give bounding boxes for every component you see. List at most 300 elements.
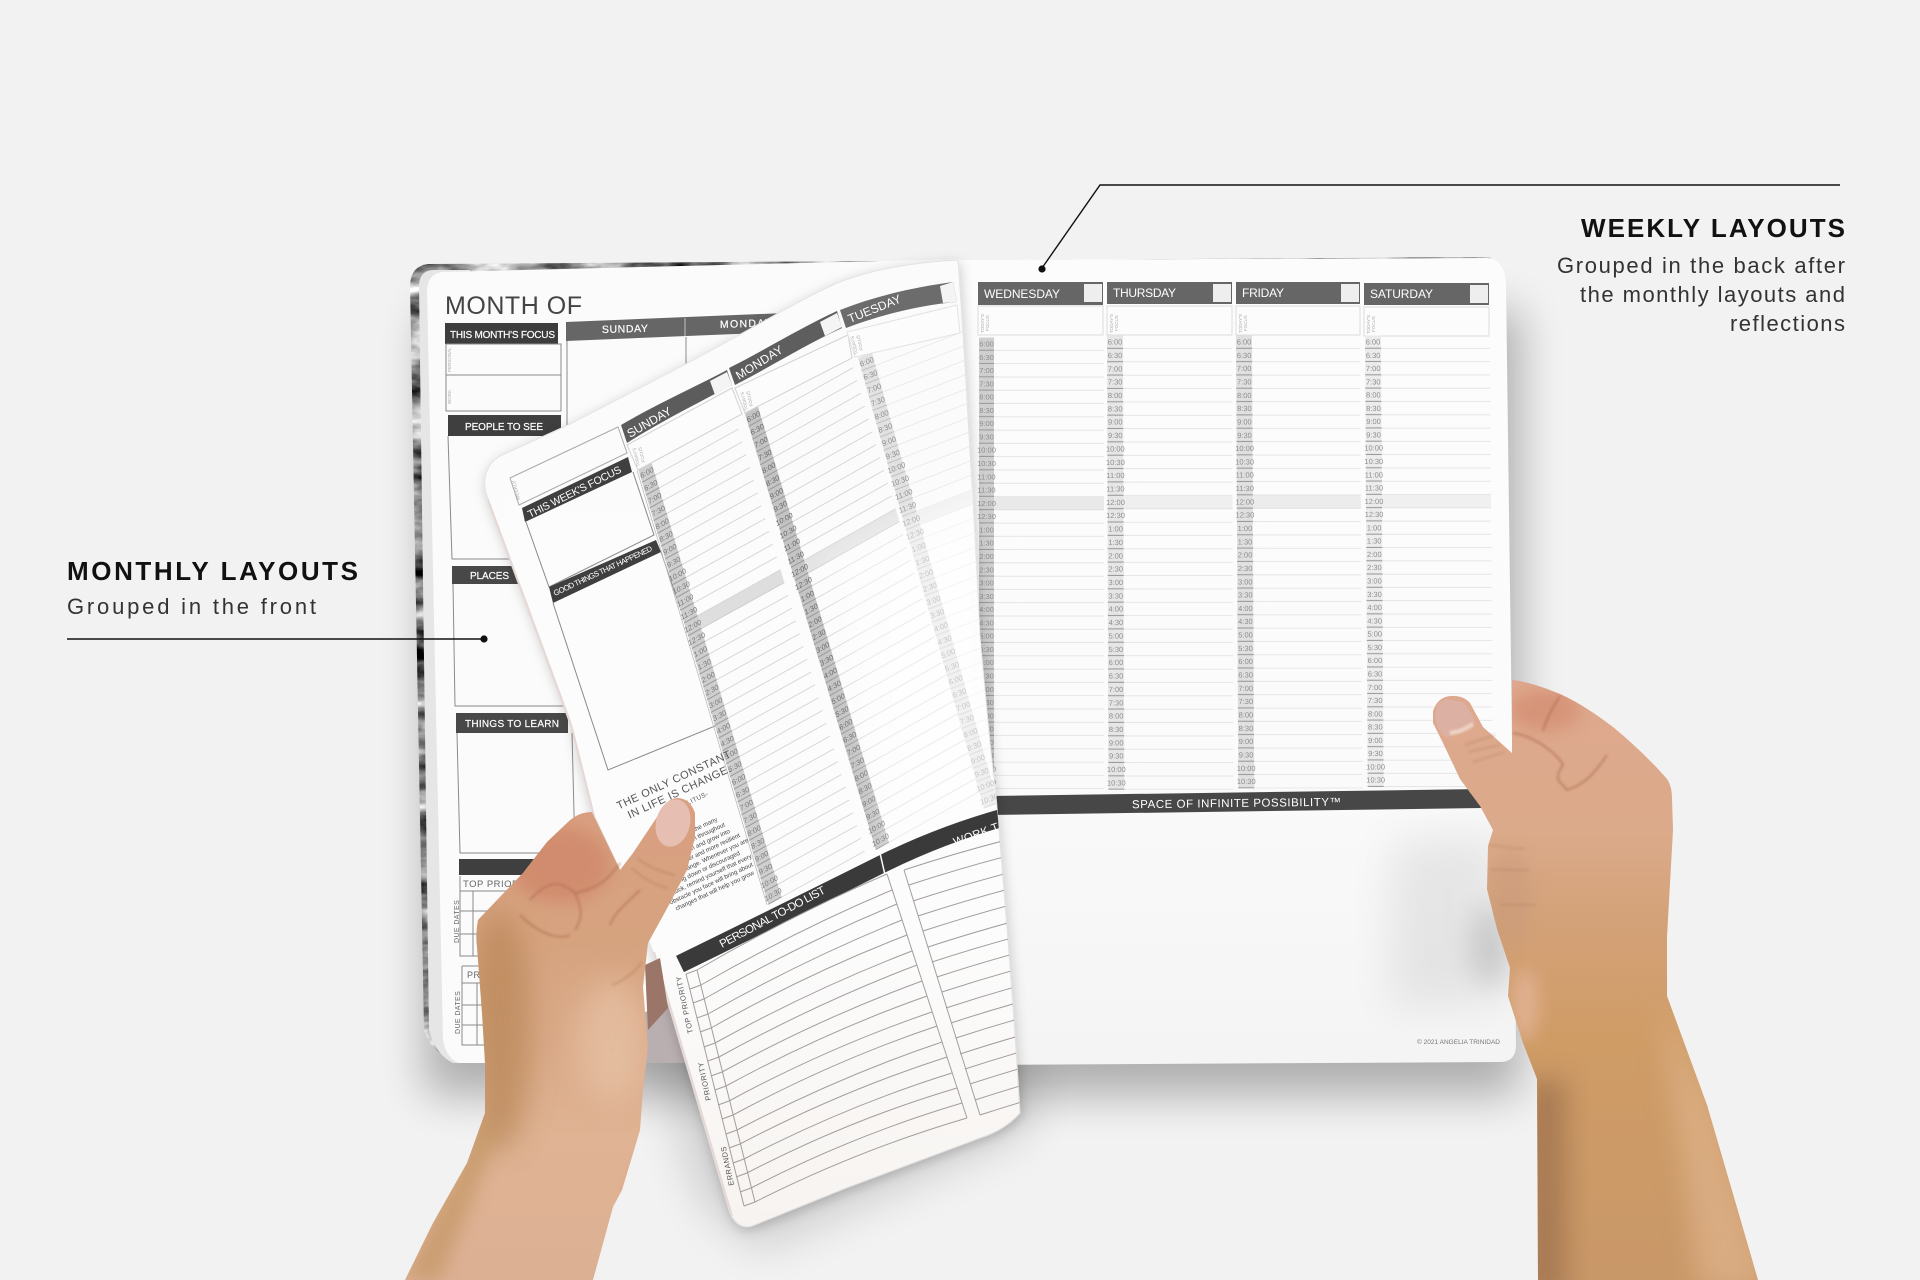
- dark forearm edge: [405, 1110, 500, 1280]
- column: monday: 12:00: [790, 562, 809, 579]
- shadow under thumb: [645, 958, 668, 1030]
- column: monday: 1:30: [804, 601, 819, 617]
- time rows: 11:30: [1365, 484, 1383, 493]
- column: sunday: 10:30: [764, 886, 783, 904]
- column: monday: 2:00: [807, 614, 823, 630]
- label: errands: ERRANDS: [719, 1145, 736, 1186]
- left page sheet: [427, 259, 960, 1063]
- column: monday: 9:30: [773, 499, 788, 514]
- time rows: 6:30: [1368, 670, 1382, 678]
- day header: monday: [729, 311, 842, 385]
- column: sunday: 5:00: [723, 746, 739, 762]
- time rows: 9:30: [1368, 749, 1383, 758]
- callout: monthly layouts: [67, 556, 488, 643]
- time rows: 6:00: [979, 658, 994, 667]
- places: PLACES: [470, 571, 509, 582]
- hand shape: [405, 798, 695, 1280]
- day header: tuesday: TUESDAY: [846, 292, 903, 326]
- heading: WEEKLY LAYOUTS: [1581, 213, 1845, 243]
- callout: weekly layouts: [1038, 185, 1845, 336]
- column: wednesday: [977, 282, 1104, 789]
- column: monday: 10:00: [775, 510, 794, 528]
- quote: the only constant: -HERACLITUS-: [661, 791, 710, 818]
- time rows: 11:00: [1236, 471, 1254, 480]
- time rows: 5:00: [1367, 630, 1382, 639]
- time rows: 11:30: [1106, 484, 1125, 494]
- time rows: 9:30: [979, 432, 994, 441]
- today's focus boxes: FOCUS: [637, 446, 646, 463]
- time rows: 7:30: [979, 698, 994, 707]
- leader dot: [1038, 265, 1046, 273]
- today's focus box: [978, 306, 1103, 335]
- good things that happened: [549, 540, 720, 770]
- time rows: 2:00: [1367, 550, 1382, 559]
- wrinkled palm edge: [1488, 852, 1532, 948]
- priorities tables: DUE DATES: [455, 991, 462, 1034]
- today's focus box: [1107, 306, 1232, 335]
- time rows: 10:30: [1106, 458, 1125, 467]
- time rows: 8:00: [1239, 710, 1253, 719]
- heading: month of: MONTH OF: [445, 292, 582, 320]
- time rows: 3:30: [1367, 590, 1382, 599]
- time rows: 8:00: [1109, 712, 1123, 721]
- book cover: marble: [410, 257, 1500, 1056]
- people to see: [448, 415, 561, 559]
- column: monday: 10:00: [867, 818, 886, 836]
- time rows: 10:00: [977, 446, 996, 455]
- time rows: 12:00: [1106, 498, 1125, 507]
- column: tuesday: 6:30: [862, 368, 879, 382]
- today's focus box: [1236, 306, 1360, 335]
- column: monday: 3:30: [819, 652, 834, 668]
- time rows: 3:30: [1108, 591, 1123, 600]
- time rows: 6:30: [1366, 351, 1380, 360]
- today's focus boxes: FOCUS: [855, 334, 864, 351]
- today's focus box: TODAY'S: [1109, 314, 1114, 333]
- time rows: 9:30: [979, 751, 994, 760]
- column: tuesday: 6:00: [948, 673, 964, 687]
- column: monday: 4:00: [823, 665, 838, 681]
- column: monday: 10:30: [779, 523, 798, 541]
- calendar header: SUNDAY: [602, 323, 648, 336]
- day header: [978, 282, 1103, 305]
- red finger: [1510, 690, 1580, 730]
- light right forearm: [1660, 1000, 1770, 1280]
- priorities tables: PRIORITY: [467, 970, 514, 980]
- column: sunday: 8:30: [658, 529, 674, 544]
- priorities tables: [454, 859, 569, 1045]
- column: tuesday: 12:00: [901, 513, 921, 529]
- time rows: 7:00: [979, 685, 994, 694]
- time rows: 3:00: [1108, 578, 1123, 587]
- time rows: 9:00: [979, 419, 994, 428]
- column: sunday: 7:00: [739, 797, 754, 813]
- time rows: 7:30: [1237, 377, 1252, 386]
- time rows: 6:30: [1237, 351, 1251, 360]
- curled page shadow on background: [640, 1000, 1030, 1250]
- column: tuesday: 6:00: [859, 355, 875, 369]
- column: monday: 8:00: [854, 768, 869, 784]
- time rows: 2:00: [979, 552, 994, 561]
- calendar header: [566, 313, 785, 427]
- day header: tuesday: [840, 282, 957, 328]
- page edge stack: [488, 500, 732, 1216]
- column: tuesday: 11:30: [898, 500, 917, 515]
- time rows: 3:00: [979, 579, 994, 588]
- time rows: 12:00: [1235, 497, 1254, 506]
- column: sunday: 11:30: [680, 605, 698, 622]
- today's focus box: TODAY'S: [980, 314, 985, 333]
- column: sunday: 7:30: [651, 503, 666, 519]
- time rows: 8:00: [1368, 709, 1383, 718]
- time rows: 10:00: [1107, 765, 1126, 774]
- time rows: 7:30: [1366, 377, 1381, 386]
- time rows: 4:30: [1109, 618, 1123, 627]
- column: sunday: 10:30: [672, 579, 691, 597]
- time rows: 11:00: [1365, 470, 1383, 479]
- time rows: 8:00: [1237, 391, 1252, 400]
- column: monday: 1:00: [800, 588, 815, 604]
- time rows: 5:00: [1109, 631, 1123, 640]
- column: tuesday: 11:00: [894, 487, 914, 502]
- today's focus boxes: TODAY'S: [740, 391, 749, 411]
- column: sunday: 6:30: [643, 478, 658, 493]
- quote: the only constant: someone wiser and more resilient: [654, 832, 742, 878]
- column: monday: 3:00: [815, 640, 830, 655]
- time rows: 8:30: [1368, 723, 1383, 732]
- page stack edges: [419, 270, 470, 1063]
- column: tuesday: 10:30: [890, 473, 910, 489]
- time rows: 4:00: [1109, 605, 1123, 614]
- today's focus boxes: [627, 305, 960, 470]
- time rows: 8:00: [1366, 391, 1381, 400]
- time rows: 3:00: [1367, 577, 1382, 586]
- time rows: 7:00: [1108, 364, 1122, 373]
- time rows: 2:30: [1108, 565, 1123, 574]
- time rows: 10:30: [977, 459, 996, 468]
- column: sunday: 12:00: [683, 617, 702, 635]
- today's focus box: FOCUS: [985, 315, 990, 331]
- time rows: 8:00: [979, 711, 994, 720]
- leader line: [1042, 185, 1840, 268]
- column: monday: 8:00: [761, 460, 776, 476]
- column: monday: 9:30: [865, 806, 880, 822]
- pink edge: [620, 1090, 650, 1190]
- right page: weekly layout: [949, 258, 1516, 1065]
- hand tone: [1488, 690, 1770, 1280]
- time rows: 8:30: [979, 725, 994, 734]
- time rows: 6:00: [979, 340, 994, 348]
- column: sunday: 10:00: [668, 566, 687, 584]
- time rows: 9:00: [1237, 417, 1252, 426]
- time rows: 8:00: [979, 393, 994, 402]
- column: sunday: 1:30: [697, 657, 712, 672]
- left page: monthly layout: [419, 259, 960, 1063]
- this week's focus: [522, 457, 654, 587]
- finger creases: [520, 863, 640, 937]
- column: monday: 4:30: [827, 678, 842, 694]
- weekly box: [510, 427, 627, 505]
- column: sunday: 8:30: [750, 836, 766, 851]
- time rows: 1:30: [1108, 538, 1123, 547]
- time rows: 12:30: [1235, 511, 1254, 520]
- time rows: 4:30: [1367, 616, 1382, 625]
- column: tuesday: 2:30: [922, 580, 938, 594]
- time rows: 7:00: [1368, 683, 1382, 692]
- column: tuesday: 2:00: [918, 567, 934, 581]
- time rows: 1:00: [1108, 525, 1123, 534]
- personal to-do table: [686, 870, 980, 1206]
- this month's focus: PERSONAL: [447, 347, 452, 372]
- time rows: 7:30: [979, 379, 994, 388]
- time rows: 3:30: [1238, 591, 1253, 600]
- label: top priority: TOP PRIORITY: [674, 975, 695, 1034]
- copyright: © 2021 ANGELIA TRINIDAD: [1417, 1038, 1500, 1046]
- description: reflections: [1730, 311, 1845, 336]
- pink thumb base: [1511, 969, 1539, 1041]
- page shadow under curled sheet: [635, 1000, 695, 1063]
- time rows: 7:30: [1108, 378, 1122, 387]
- finger creases: [1513, 696, 1607, 790]
- time rows: 5:30: [1109, 645, 1123, 654]
- column: tuesday: 9:00: [881, 434, 897, 448]
- column: monday: 10:30: [871, 831, 890, 849]
- right page sheet: [949, 258, 1516, 1065]
- column: monday: 6:30: [750, 422, 765, 437]
- column: tuesday: 10:00: [975, 778, 995, 794]
- thumbnail: [651, 796, 695, 850]
- time rows: 9:30: [1237, 431, 1252, 440]
- calendar header: MONDAY: [720, 317, 772, 331]
- time rows: 8:30: [979, 406, 994, 415]
- infographic scene: [67, 184, 1845, 1280]
- column: sunday: 3:30: [712, 708, 727, 723]
- time rows: 7:00: [979, 366, 994, 375]
- time rows: 7:30: [1109, 698, 1123, 707]
- thumbnail: [1435, 699, 1475, 738]
- things to learn: [456, 713, 590, 853]
- time rows: 1:30: [1238, 537, 1252, 546]
- column: monday: [743, 355, 980, 851]
- column: sunday: 12:30: [687, 630, 706, 648]
- tan back of hand: [468, 910, 532, 1150]
- column: monday: 8:30: [765, 473, 780, 489]
- column: tuesday: 8:30: [966, 739, 982, 753]
- column: monday: 11:30: [787, 549, 805, 567]
- column: tuesday: 12:30: [905, 526, 925, 542]
- time rows: 9:00: [1108, 418, 1123, 427]
- time rows: 6:30: [1238, 671, 1253, 680]
- column: tuesday: 1:00: [911, 540, 927, 554]
- thumb wrinkles: [612, 858, 675, 985]
- column: tuesday: 6:30: [951, 686, 967, 700]
- people to see: PEOPLE TO SEE: [465, 422, 543, 433]
- day header: [1364, 283, 1489, 305]
- page sheet: [485, 260, 1020, 1227]
- time rows: [1106, 336, 1233, 790]
- time rows: 10:00: [1366, 762, 1385, 771]
- highlight on curled sheet: [828, 502, 997, 850]
- column: monday: 7:00: [753, 434, 769, 450]
- time rows: 10:30: [1107, 778, 1126, 787]
- time rows: 12:30: [1106, 511, 1125, 520]
- column: tuesday: 10:00: [886, 460, 906, 476]
- to-do bars: PERSONAL TO-DO LIST: [718, 885, 828, 951]
- this month's focus: [445, 323, 561, 411]
- time rows: 6:00: [1109, 658, 1123, 667]
- time rows: 9:00: [1239, 737, 1253, 746]
- time rows: 5:30: [979, 645, 994, 654]
- hand contact shadow: [1472, 905, 1512, 985]
- time rows: 4:00: [1367, 603, 1382, 612]
- column: tuesday: 5:00: [940, 646, 956, 660]
- hand shadow on page: [1390, 830, 1515, 1010]
- column: sunday: 6:30: [735, 784, 750, 800]
- column: sunday: 9:30: [666, 554, 681, 570]
- column: monday: 12:30: [794, 574, 813, 592]
- description: Grouped in the front: [67, 594, 316, 619]
- column: tuesday: 9:00: [970, 752, 986, 766]
- time rows: 9:30: [1239, 750, 1253, 759]
- column: thursday: [1106, 282, 1233, 790]
- dark left forearm: [1525, 1080, 1565, 1280]
- time rows: 6:30: [1109, 672, 1123, 681]
- time rows: 5:30: [1238, 644, 1253, 653]
- heading: MONTHLY LAYOUTS: [67, 556, 358, 586]
- column: sunday: 3:00: [708, 695, 723, 711]
- time rows: 9:00: [1366, 417, 1381, 426]
- this month's focus: WORK: [447, 390, 452, 404]
- today's focus box: FOCUS: [1243, 315, 1248, 331]
- day header: FRIDAY: [1242, 286, 1284, 300]
- today's focus box: FOCUS: [1371, 316, 1376, 332]
- book shadow: [425, 310, 1520, 1095]
- column: sunday: [637, 417, 865, 906]
- day header: sunday: [621, 370, 732, 443]
- column: sunday: 1:00: [693, 644, 708, 660]
- column: monday: 9:00: [861, 794, 877, 809]
- column: monday: 9:00: [769, 486, 784, 501]
- time rows: 6:00: [1366, 338, 1380, 346]
- time rows: 6:30: [1108, 351, 1122, 360]
- column: tuesday: 7:30: [870, 395, 886, 409]
- column: monday: 5:30: [834, 704, 850, 720]
- time rows: 7:00: [1238, 684, 1253, 693]
- column: sunday: 11:00: [676, 592, 694, 609]
- time rows: 12:00: [977, 499, 996, 508]
- time rows: [1364, 336, 1493, 787]
- column: tuesday: 3:00: [925, 593, 941, 607]
- quote: the only constant: [616, 750, 754, 910]
- day header: monday: MONDAY: [733, 343, 786, 383]
- things to learn: THINGS TO LEARN: [465, 719, 559, 730]
- this month's focus: THIS MONTH'S FOCUS: [450, 330, 555, 341]
- time rows: 1:00: [1367, 523, 1381, 532]
- quote: the only constant: your life, learn and grow into: [658, 828, 732, 867]
- leader dot: [480, 635, 488, 643]
- day header: sunday: SUNDAY: [624, 404, 674, 441]
- time rows: 12:00: [1365, 497, 1383, 506]
- column: sunday: 8:00: [655, 516, 670, 532]
- column: tuesday: 9:30: [885, 448, 901, 462]
- column: tuesday: 10:30: [979, 791, 999, 807]
- column: monday: 6:00: [746, 409, 761, 425]
- column: sunday: 8:00: [746, 823, 762, 839]
- left hand: [405, 796, 695, 1280]
- thumbnail lunula: [1450, 724, 1473, 733]
- description: the monthly layouts and: [1580, 282, 1845, 307]
- time rows: 10:00: [1235, 444, 1254, 453]
- time rows: 8:30: [1366, 404, 1381, 413]
- time rows: 7:00: [1366, 364, 1381, 373]
- time rows: 9:00: [1368, 736, 1383, 745]
- column: monday: 8:30: [857, 781, 873, 797]
- time rows: 4:00: [1238, 604, 1253, 613]
- time rows: 10:30: [977, 778, 996, 787]
- column: sunday: 4:30: [720, 733, 735, 749]
- weekly box: WEEKLY: [511, 479, 522, 501]
- column: sunday: 6:00: [731, 772, 746, 787]
- time rows: 2:30: [1367, 563, 1382, 572]
- quote: the only constant: with every change. Whenever you are: [652, 837, 750, 888]
- time rows: 12:30: [1365, 510, 1383, 519]
- places: [452, 566, 570, 706]
- time rows: 1:30: [979, 539, 994, 548]
- column: saturday: [1364, 283, 1493, 787]
- column: tuesday: [858, 332, 996, 808]
- time rows: 2:00: [1238, 551, 1252, 560]
- page contents: [510, 282, 1020, 1206]
- quote: the only constant: THE ONLY CONSTANT: [615, 748, 734, 812]
- today's focus boxes: TODAY'S: [632, 447, 641, 467]
- column: friday: [1235, 282, 1362, 788]
- hand tone: [405, 827, 650, 1280]
- banner: space of infinite possibility: SPACE OF INFINITE POSSIBILITY™: [1132, 797, 1341, 811]
- time rows: 7:00: [1237, 364, 1251, 373]
- quote: the only constant: IN LIFE IS CHANGE.: [626, 763, 733, 821]
- column: sunday: 9:00: [662, 541, 678, 557]
- time rows: 7:00: [1109, 685, 1123, 694]
- time rows: 9:30: [1366, 430, 1381, 439]
- time rows: 8:30: [1239, 724, 1253, 733]
- column: monday: 2:30: [811, 627, 827, 643]
- banner: space of infinite possibility: [990, 789, 1482, 815]
- quote: the only constant: or stuck, remind yourself that every: [663, 853, 754, 900]
- time rows: 1:30: [1367, 537, 1382, 546]
- time rows: 11:30: [977, 486, 996, 495]
- time rows: 9:00: [979, 738, 994, 747]
- column: tuesday: 7:30: [959, 713, 975, 727]
- time rows: 7:30: [1368, 696, 1383, 705]
- time rows: 12:30: [977, 512, 996, 521]
- day header: WEDNESDAY: [984, 287, 1060, 301]
- quote: the only constant: changes known throughout: [656, 821, 727, 859]
- time rows: [1235, 336, 1362, 788]
- column: tuesday: 4:30: [937, 633, 953, 647]
- time rows: 1:00: [1238, 524, 1252, 533]
- light thumb base: [578, 978, 646, 1102]
- time rows: 10:30: [1237, 777, 1256, 786]
- time rows: 2:30: [1238, 564, 1252, 573]
- priorities tables: DUE DATES: [454, 900, 461, 943]
- column: sunday: 7:00: [647, 490, 662, 506]
- column: tuesday: 8:00: [963, 726, 979, 740]
- today's focus box: TODAY'S: [1238, 314, 1243, 333]
- time rows: 4:00: [979, 605, 994, 614]
- today's focus boxes: TODAY'S: [850, 335, 859, 355]
- time rows: 8:30: [1237, 404, 1252, 413]
- day header: [1236, 282, 1360, 304]
